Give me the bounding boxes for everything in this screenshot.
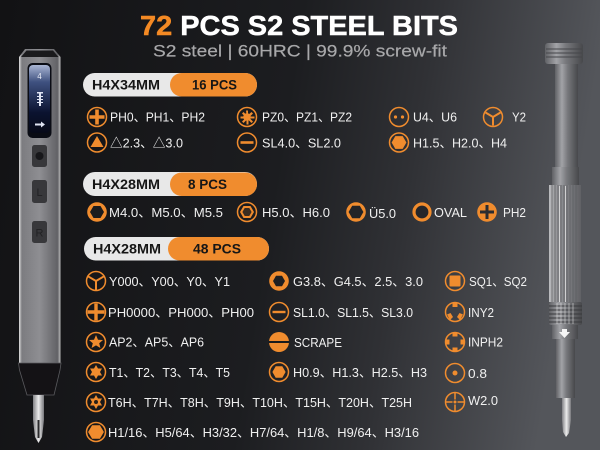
screwdriver screen: 4 bbox=[37, 72, 42, 81]
row: Y2: Y2 bbox=[512, 110, 526, 125]
row: triangle bbox=[88, 133, 183, 152]
row: H0.9 bbox=[270, 362, 427, 382]
row: PH0: PH0、PH1、PH2 bbox=[110, 110, 205, 125]
row: SCRAPE bbox=[268, 332, 342, 352]
power button bbox=[32, 145, 47, 167]
row: G3.8 bbox=[269, 271, 423, 291]
row: SL1.0 bbox=[270, 302, 413, 322]
pill: H4X34MM 16 PCS: 16 PCS bbox=[192, 78, 237, 93]
row: PZ0: PZ0、PZ1、PZ2 bbox=[262, 110, 352, 125]
row: SCRAPE: SCRAPE bbox=[294, 335, 342, 350]
row: Y000: Y000、Y00、Y0、Y1 bbox=[109, 274, 230, 289]
row: INPH2: INPH2 bbox=[468, 334, 503, 350]
row: INY2: INY2 bbox=[468, 305, 494, 320]
row: SL4.0: SL4.0、SL2.0 bbox=[262, 136, 341, 150]
row: T1: T1、T2、T3、T4、T5 bbox=[109, 365, 230, 380]
precision screwdriver bbox=[545, 43, 583, 437]
row: U5.0: Ü5.0 bbox=[369, 206, 396, 221]
row: H5.0 bbox=[238, 202, 330, 222]
row: U4: U4、U6 bbox=[413, 110, 457, 125]
row: W2.0 bbox=[446, 392, 498, 412]
row: PH0000 bbox=[86, 302, 254, 322]
row: Y000 bbox=[86, 272, 230, 290]
screwdriver screen bbox=[28, 63, 52, 138]
row: OVAL bbox=[414, 204, 467, 220]
row: T6H: T6H、T7H、T8H、T9H、T10H、T15H、T20H、T25H bbox=[108, 395, 412, 410]
row: H0.9: H0.9、H1.3、H2.5、H3 bbox=[293, 365, 427, 380]
subtitle: S2 steel | 60HRC | 99.9% screw-fit bbox=[153, 42, 447, 60]
title: 72 PCS S2 STEEL BITS bbox=[140, 10, 458, 41]
row: PH0 bbox=[88, 108, 205, 126]
row: PH2 bbox=[477, 202, 526, 222]
L button: L bbox=[36, 187, 43, 199]
pill: H4X28MM 8 PCS: H4X28MM bbox=[92, 177, 160, 192]
pill: H4X28MM 48 PCS bbox=[84, 237, 269, 260]
pill: H4X34MM 16 PCS bbox=[83, 73, 257, 96]
electric screwdriver bbox=[18, 49, 61, 443]
pill: H4X28MM 8 PCS bbox=[83, 172, 257, 196]
row: T1 bbox=[86, 362, 230, 382]
row: SL1.0: SL1.0、SL1.5、SL3.0 bbox=[293, 305, 413, 320]
L button bbox=[32, 180, 47, 203]
pill: H4X28MM 8 PCS: 8 PCS bbox=[188, 177, 227, 192]
row: SL4.0 bbox=[238, 133, 341, 152]
row: Y2 bbox=[484, 108, 526, 126]
row: U4 bbox=[390, 108, 457, 126]
row: 0.8: 0.8 bbox=[468, 366, 487, 381]
row: INY2 bbox=[446, 302, 494, 322]
row: H1/16: H1/16、H5/64、H3/32、H7/64、H1/8、H9/64、H3/16 bbox=[108, 425, 419, 440]
R button: R bbox=[36, 228, 44, 240]
pill: H4X28MM 48 PCS: H4X28MM bbox=[93, 242, 161, 256]
R button bbox=[32, 221, 47, 243]
row: PH2: PH2 bbox=[503, 205, 526, 220]
pill: H4X34MM 16 PCS: H4X34MM bbox=[92, 78, 160, 93]
row: PH0000: PH0000、PH000、PH00 bbox=[108, 305, 254, 320]
row: triangle: △2.3、△3.0 bbox=[110, 136, 183, 150]
row: H5.0: H5.0、H6.0 bbox=[262, 205, 330, 220]
row: INPH2 bbox=[446, 332, 503, 352]
row: H1.5: H1.5、H2.0、H4 bbox=[413, 136, 507, 150]
row: H1.5 bbox=[390, 133, 507, 152]
row: 0.8 bbox=[446, 364, 487, 382]
row: AP2 bbox=[86, 332, 204, 352]
row: SQ1 bbox=[446, 272, 527, 290]
row: PZ0 bbox=[238, 108, 352, 126]
row: U5.0 bbox=[346, 202, 396, 222]
pill: H4X28MM 48 PCS: 48 PCS bbox=[193, 242, 241, 256]
row: M4.0: M4.0、M5.0、M5.5 bbox=[109, 205, 223, 220]
row: W2.0: W2.0 bbox=[468, 393, 498, 408]
row: G3.8: G3.8、G4.5、2.5、3.0 bbox=[293, 274, 423, 289]
row: OVAL: OVAL bbox=[434, 205, 467, 220]
row: AP2: AP2、AP5、AP6 bbox=[109, 334, 204, 350]
row: M4.0 bbox=[87, 202, 223, 222]
row: SQ1: SQ1、SQ2 bbox=[469, 274, 527, 289]
